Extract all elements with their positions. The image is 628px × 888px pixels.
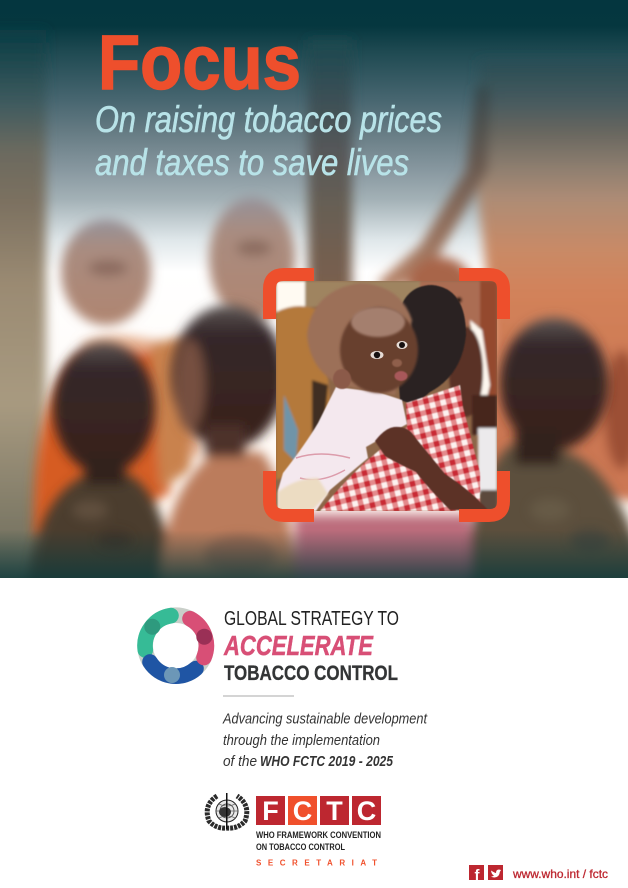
divider bbox=[223, 696, 294, 697]
white footer panel bbox=[0, 578, 628, 888]
blurred crowd of children bbox=[34, 197, 295, 536]
strategy description: WHO FCTC 2019 - 2025 bbox=[260, 754, 394, 770]
FCTC logo: C bbox=[293, 796, 312, 826]
strategy description: Advancing sustainable development bbox=[222, 712, 428, 728]
subtitle: On raising tobacco prices bbox=[95, 99, 442, 140]
subtitle bbox=[95, 99, 442, 183]
baby's arm bbox=[375, 427, 488, 510]
background of the focused photo bbox=[276, 281, 497, 511]
front middle child bbox=[160, 452, 298, 590]
pink garment bbox=[295, 515, 471, 585]
front left child bbox=[28, 475, 178, 590]
strategy description bbox=[222, 712, 428, 770]
strategy description: of the bbox=[223, 754, 257, 770]
front right child bbox=[466, 445, 628, 590]
strategy heading bbox=[223, 608, 399, 685]
baby's hair bbox=[307, 283, 412, 395]
title: Focus: Focus bbox=[98, 20, 301, 106]
FCTC logo: SECRETARIAT bbox=[256, 858, 377, 868]
FCTC logo: F bbox=[262, 796, 279, 826]
baby's white shirt bbox=[278, 387, 407, 511]
icon: facebook bbox=[469, 865, 484, 884]
strategy description: through the implementation bbox=[223, 733, 380, 749]
eyes, nose and mouth bbox=[370, 351, 384, 359]
older child's head bbox=[395, 285, 466, 405]
FCTC logo: ON TOBACCO CONTROL bbox=[256, 842, 345, 853]
mottled clothing texture bbox=[72, 498, 610, 575]
baby's face bbox=[340, 307, 418, 393]
strategy heading: ACCELERATE bbox=[223, 630, 374, 661]
website link: www.who.int / fctc bbox=[512, 867, 608, 881]
orange focus brackets bbox=[270, 274, 504, 516]
icon: WHO emblem bbox=[207, 793, 247, 829]
checked shirt bbox=[320, 385, 480, 511]
FCTC logo: C bbox=[357, 796, 376, 826]
strategy heading: GLOBAL STRATEGY TO bbox=[224, 608, 399, 630]
icon: facebook: f bbox=[474, 867, 480, 884]
icon: twitter bbox=[488, 865, 503, 880]
FCTC logo bbox=[256, 796, 381, 868]
Global Strategy ring logo bbox=[144, 615, 212, 683]
FCTC logo: WHO FRAMEWORK CONVENTION bbox=[256, 830, 381, 841]
back row bbox=[80, 336, 200, 460]
hero photo background bbox=[0, 0, 628, 590]
strategy heading: TOBACCO CONTROL bbox=[224, 661, 398, 685]
photo in focus: baby carried by a child bbox=[276, 281, 497, 511]
blurred wall and pillars bbox=[0, 30, 628, 590]
subtitle: and taxes to save lives bbox=[95, 142, 409, 183]
FCTC logo: T bbox=[326, 796, 343, 826]
